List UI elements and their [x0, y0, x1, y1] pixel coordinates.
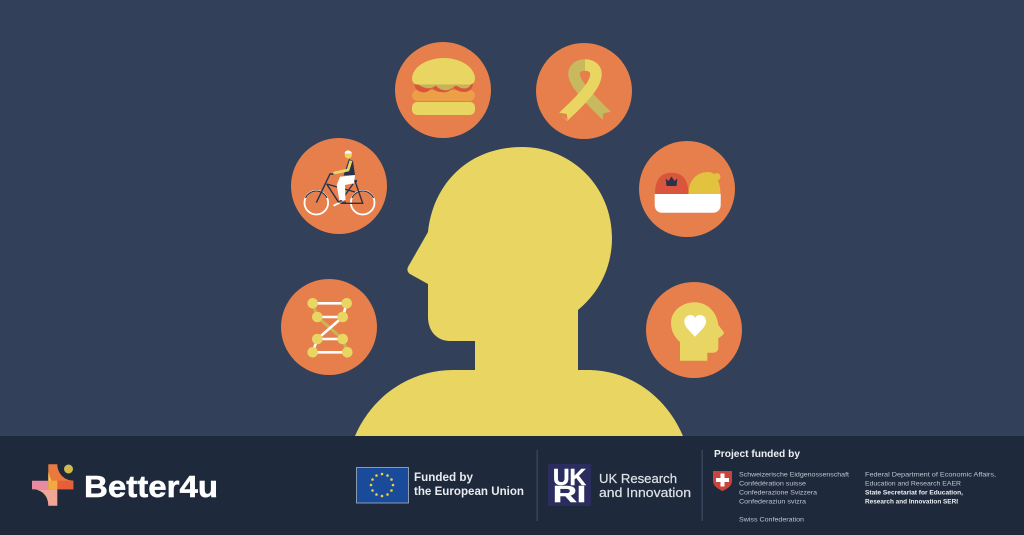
- logo: UKRI: UK: [553, 464, 586, 490]
- logo wordmark: Better4u: [84, 469, 218, 504]
- icon: DNA helix: [281, 279, 377, 375]
- text: UK Research and Innovation: and Innovation: [599, 485, 691, 500]
- text: Swiss Confederation languages: Swiss Confederation: [739, 516, 804, 524]
- icon: awareness ribbon: [536, 43, 632, 139]
- head and shoulders silhouette: [355, 147, 683, 436]
- icon: cyclist: [291, 138, 387, 234]
- divider: [702, 450, 703, 521]
- text: Swiss Confederation languages: Confederazione Svizzera: [739, 490, 817, 496]
- text: UK Research and Innovation: UK Research: [599, 471, 677, 486]
- logo: UKRI: [548, 464, 591, 507]
- text: Federal Department and SERI: [865, 472, 996, 506]
- icon: Swiss shield: [713, 471, 732, 491]
- text: Federal Department and SERI: Federal Department of Economic Affairs,: [865, 472, 996, 478]
- logo: Better4u: [32, 464, 218, 506]
- icon: head with heart: [646, 282, 742, 378]
- footer band: [0, 436, 1024, 535]
- icon: food bowl: [639, 141, 735, 237]
- text: funded by the European Union: [414, 472, 524, 498]
- text: Federal Department and SERI: Education and Research EAER: [865, 480, 961, 488]
- text: Swiss Confederation languages: Confédération suisse: [739, 480, 806, 488]
- text: UK Research and Innovation: [599, 471, 691, 500]
- text: Swiss Confederation languages: [739, 472, 849, 524]
- heading: project funded by: Project funded by: [714, 448, 800, 460]
- text: funded by the European Union: Funded by: [414, 472, 474, 484]
- text: Swiss Confederation languages: Schweizerische Eidgenossenschaft: [739, 472, 849, 478]
- divider: [536, 450, 538, 521]
- text: Federal Department and SERI: Research and Innovation SERI: [865, 498, 958, 506]
- logo: EU flag: [356, 468, 408, 503]
- logo mark: [32, 464, 73, 506]
- text: funded by the European Union: the European Union: [414, 486, 524, 498]
- icon: burger: [395, 42, 491, 138]
- text: Swiss Confederation languages: Confederaziun svizra: [739, 498, 806, 506]
- text: Federal Department and SERI: State Secretariat for Education,: [865, 490, 963, 496]
- logo: UKRI: RI: [553, 481, 586, 507]
